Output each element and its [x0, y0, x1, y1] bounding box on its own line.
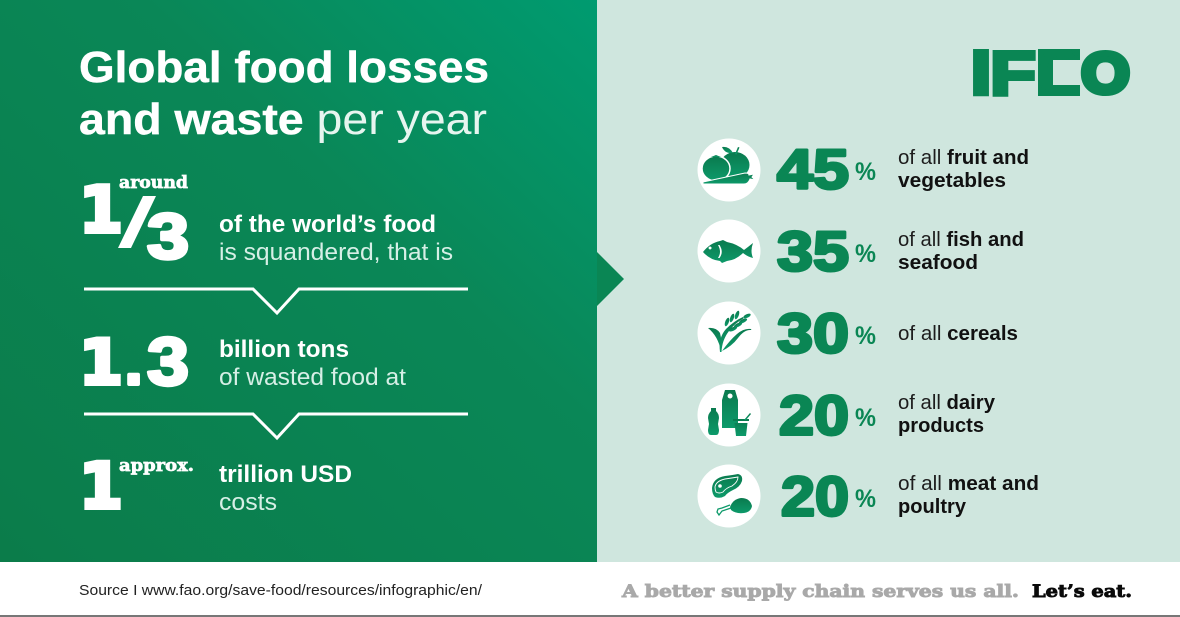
- icon: fish: [703, 240, 753, 263]
- divider arrow: [84, 414, 468, 438]
- logo: C: [1036, 36, 1082, 109]
- row: meat and poultry: %: [855, 485, 876, 513]
- icon: fruit and vegetables: [702, 147, 755, 184]
- stat: one third: of the world’s food: [219, 211, 436, 238]
- row: meat and poultry: 20: [781, 464, 849, 528]
- icon: dairy: [708, 390, 751, 436]
- row: dairy products: products: [898, 415, 984, 437]
- row: fish and seafood: %: [855, 240, 876, 268]
- arrow: [597, 252, 624, 306]
- logo: [973, 49, 1130, 97]
- row: cereals: [698, 302, 1018, 364]
- row: fish and seafood: [698, 220, 1024, 282]
- row: meat and poultry: [698, 464, 1039, 528]
- row: dairy products: of all dairy: [898, 392, 996, 414]
- stat: 1 trillion USD: 1: [79, 450, 123, 523]
- title: [79, 43, 489, 144]
- row: dairy products: 20: [779, 384, 849, 446]
- stat: 1.3 billion tons: billion tons: [219, 336, 349, 363]
- panel: breakdown by food type: [597, 0, 1180, 562]
- divider arrow: [84, 289, 468, 313]
- stat: 1.3 billion tons: [79, 324, 406, 400]
- icon: meat and poultry: [712, 474, 752, 515]
- title: and waste per year: [79, 95, 487, 144]
- row: fruit and vegetables: of all fruit and: [898, 147, 1029, 169]
- footer: slogan: [621, 582, 1132, 602]
- row: fish and seafood: 35: [777, 220, 849, 282]
- stat: 1 trillion USD: costs: [219, 489, 277, 516]
- row: fish and seafood: of all fish and: [898, 229, 1024, 251]
- stat: 1 trillion USD: trillion USD: [219, 461, 352, 488]
- stat: one third: 3: [147, 200, 189, 272]
- stat: one third: is squandered, that is: [219, 239, 453, 266]
- row: fruit and vegetables: vegetables: [898, 170, 1006, 192]
- row: dairy products: %: [855, 404, 876, 432]
- row: fruit and vegetables: 45: [777, 138, 849, 200]
- footer: slogan: Let’s eat.: [1032, 582, 1132, 602]
- stat: one third: around: [119, 173, 188, 193]
- row: fish and seafood: seafood: [898, 252, 978, 274]
- footer: source: Source I www.fao.org/save-food/resources/infographic/en/: [79, 582, 483, 599]
- stat: one third: [79, 173, 453, 272]
- row: cereals: %: [855, 322, 876, 350]
- panel: global totals: [0, 0, 597, 562]
- logo: O: [1082, 42, 1130, 106]
- stat: 1.3 billion tons: of wasted food at: [219, 364, 406, 391]
- stat: 1 trillion USD: [79, 450, 352, 523]
- stat: 1.3 billion tons: 3: [147, 324, 189, 400]
- row: dairy products: [698, 384, 996, 446]
- icon: wheat: [708, 310, 751, 352]
- logo: F: [990, 40, 1036, 108]
- row: meat and poultry: of all meat and: [898, 473, 1039, 495]
- row: fruit and vegetables: [698, 138, 1029, 202]
- footer rule: [0, 615, 1180, 617]
- stat: 1.3 billion tons: 1: [79, 326, 123, 399]
- row: fruit and vegetables: %: [855, 158, 876, 186]
- row: meat and poultry: poultry: [898, 496, 967, 518]
- row: cereals: 30: [777, 302, 849, 364]
- stat: one third: 1: [79, 174, 123, 248]
- footer: slogan: A better supply chain serves us all.: [621, 582, 1019, 602]
- stat: 1 trillion USD: approx.: [119, 456, 194, 476]
- title: Global food losses: [79, 43, 489, 92]
- stat: 1.3 billion tons: .: [125, 329, 142, 398]
- logo: I: [969, 36, 993, 109]
- row: cereals: of all cereals: [898, 323, 1018, 345]
